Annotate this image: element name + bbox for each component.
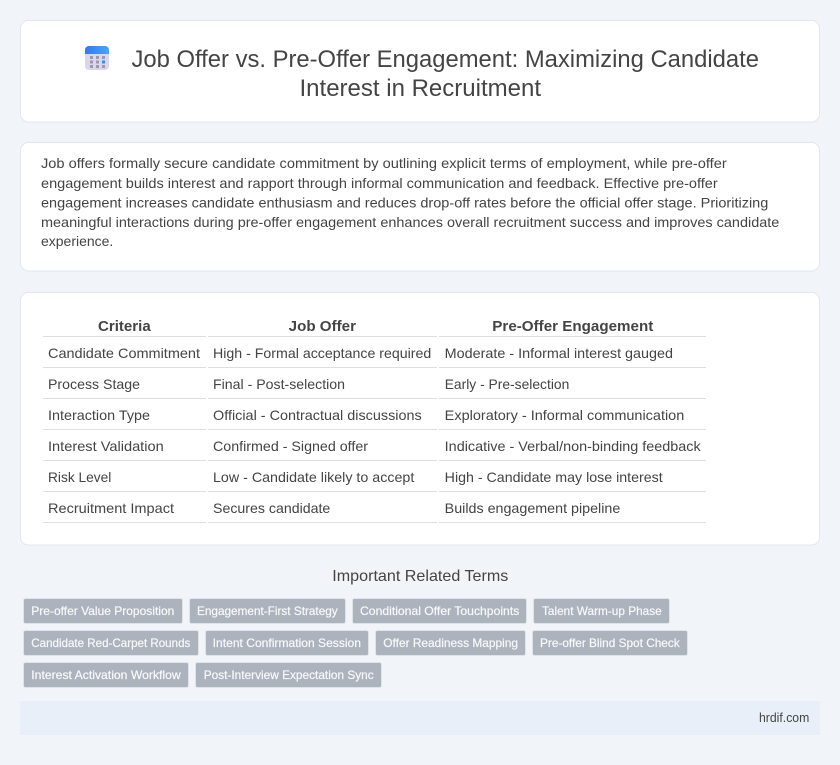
tag: Post-Interview Expectation Sync	[204, 668, 374, 682]
intro panel	[20, 142, 820, 271]
footer source text: hrdif.com	[759, 711, 809, 725]
row: recruitment impact: Builds engagement pipeline	[445, 500, 621, 516]
row: recruitment impact	[43, 500, 706, 523]
tag	[352, 598, 526, 624]
table panel	[20, 292, 820, 545]
row: risk level: Low - Candidate likely to accept	[213, 469, 414, 485]
row: process stage	[43, 376, 706, 399]
table header row: Job Offer	[289, 319, 356, 335]
tag	[24, 630, 198, 656]
tag: Candidate Red-Carpet Rounds	[31, 636, 190, 650]
intro text: Job offers formally secure candidate commitment by outlining explicit terms of employment, while pre-offer	[41, 155, 727, 171]
row: interaction type	[43, 407, 706, 430]
title	[132, 46, 759, 102]
tag: Pre-offer Blind Spot Check	[540, 636, 681, 650]
row: risk level	[43, 469, 706, 492]
table header row	[43, 319, 706, 337]
table header row: Criteria	[98, 319, 152, 335]
header panel	[20, 20, 820, 122]
tag: Talent Warm-up Phase	[542, 604, 662, 618]
intro text: experience.	[41, 233, 113, 249]
heading: important related terms: Important Related Terms	[332, 568, 508, 585]
tag: Intent Confirmation Session	[213, 636, 361, 650]
row: process stage: Early - Pre-selection	[445, 376, 569, 392]
title: Job Offer vs. Pre-Offer Engagement: Maximizing Candidate	[132, 46, 759, 73]
intro text: meaningful interactions during pre-offer engagement enhances overall recruitment success and improves candidate	[41, 214, 780, 230]
row: risk level: High - Candidate may lose interest	[445, 469, 663, 485]
tag	[376, 630, 526, 656]
row: interest validation: Confirmed - Signed offer	[213, 438, 368, 454]
row: interaction type: Official - Contractual discussions	[213, 407, 422, 423]
tag	[206, 630, 368, 656]
tag: Engagement-First Strategy	[197, 604, 338, 618]
row: interest validation	[43, 438, 706, 461]
row: candidate commitment: Moderate - Informal interest gauged	[445, 345, 673, 361]
footer bar	[20, 701, 820, 735]
intro text	[41, 155, 780, 249]
tag: Interest Activation Workflow	[31, 668, 181, 682]
related terms tags	[24, 598, 688, 688]
tag	[196, 662, 382, 688]
table header row: Pre-Offer Engagement	[492, 319, 653, 335]
tag: Pre-offer Value Proposition	[31, 604, 174, 618]
tag: Conditional Offer Touchpoints	[360, 604, 519, 618]
tag	[532, 630, 688, 656]
row: interest validation: Interest Validation	[48, 438, 164, 454]
row: interaction type: Interaction Type	[48, 407, 150, 423]
row: process stage: Final - Post-selection	[213, 376, 345, 392]
title: Interest in Recruitment	[300, 75, 541, 102]
row: candidate commitment	[43, 345, 706, 368]
tag	[534, 598, 670, 624]
row: process stage: Process Stage	[48, 376, 140, 392]
tag	[24, 662, 188, 688]
tag	[190, 598, 346, 624]
intro text: engagement builds interest and rapport through informal communication and feedback. Effective pre-offer	[41, 175, 718, 191]
row: risk level: Risk Level	[48, 469, 111, 485]
row: candidate commitment: Candidate Commitment	[48, 345, 200, 361]
row: recruitment impact: Secures candidate	[213, 500, 331, 516]
tag	[24, 598, 182, 624]
row: interest validation: Indicative - Verbal/non-binding feedback	[445, 438, 702, 454]
row: recruitment impact: Recruitment Impact	[48, 500, 174, 516]
row: candidate commitment: High - Formal acceptance required	[213, 345, 431, 361]
tag: Offer Readiness Mapping	[383, 636, 518, 650]
intro text: engagement increases candidate enthusiasm and reduces drop-off rates before the official offer stage. Prioritizing	[41, 194, 768, 210]
row: interaction type: Exploratory - Informal communication	[445, 407, 684, 423]
icon: calendar	[85, 46, 109, 70]
